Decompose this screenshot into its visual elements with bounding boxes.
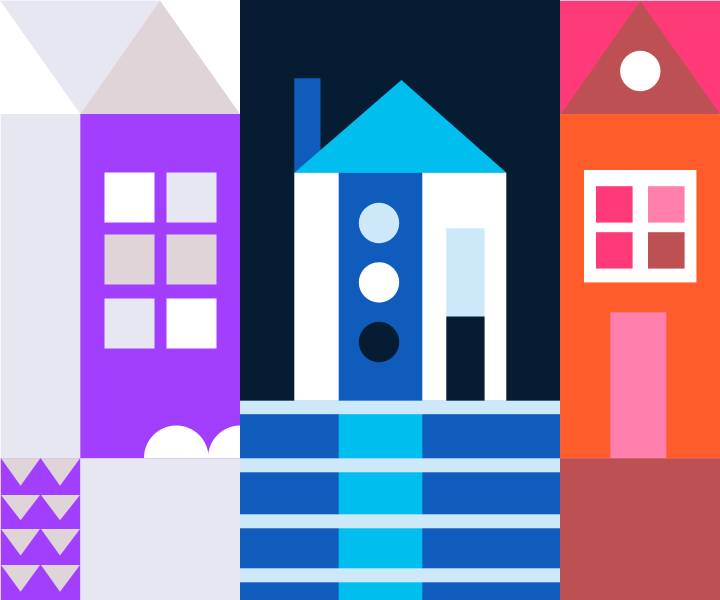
door	[446, 228, 485, 401]
red ground tile	[560, 458, 720, 600]
left house side wall	[1, 114, 80, 458]
pink door	[610, 312, 666, 458]
panel: centre blue house at night	[240, 0, 560, 600]
red roof	[561, 1, 720, 114]
chimney	[294, 78, 320, 173]
purple triangle pattern tile	[1, 458, 80, 600]
cyan roof	[294, 80, 506, 173]
night sky background	[240, 0, 560, 401]
left house roof: lilac inverted triangle	[0, 0, 160, 114]
left house window grid	[104, 172, 216, 348]
left house white bushes	[144, 426, 240, 458]
house white body	[294, 173, 506, 401]
attic round window	[620, 51, 660, 91]
orange wall	[560, 114, 720, 458]
white window frame with panes	[584, 170, 696, 282]
lilac ground tile	[80, 458, 240, 600]
house blue column	[339, 173, 422, 401]
striped water base	[240, 401, 560, 600]
left house roof: taupe triangle	[80, 0, 240, 114]
round windows	[359, 203, 399, 362]
left house purple wall	[80, 114, 240, 458]
panel: left purple house	[0, 0, 240, 600]
panel: right orange house	[560, 1, 720, 600]
pink sky	[560, 1, 720, 114]
